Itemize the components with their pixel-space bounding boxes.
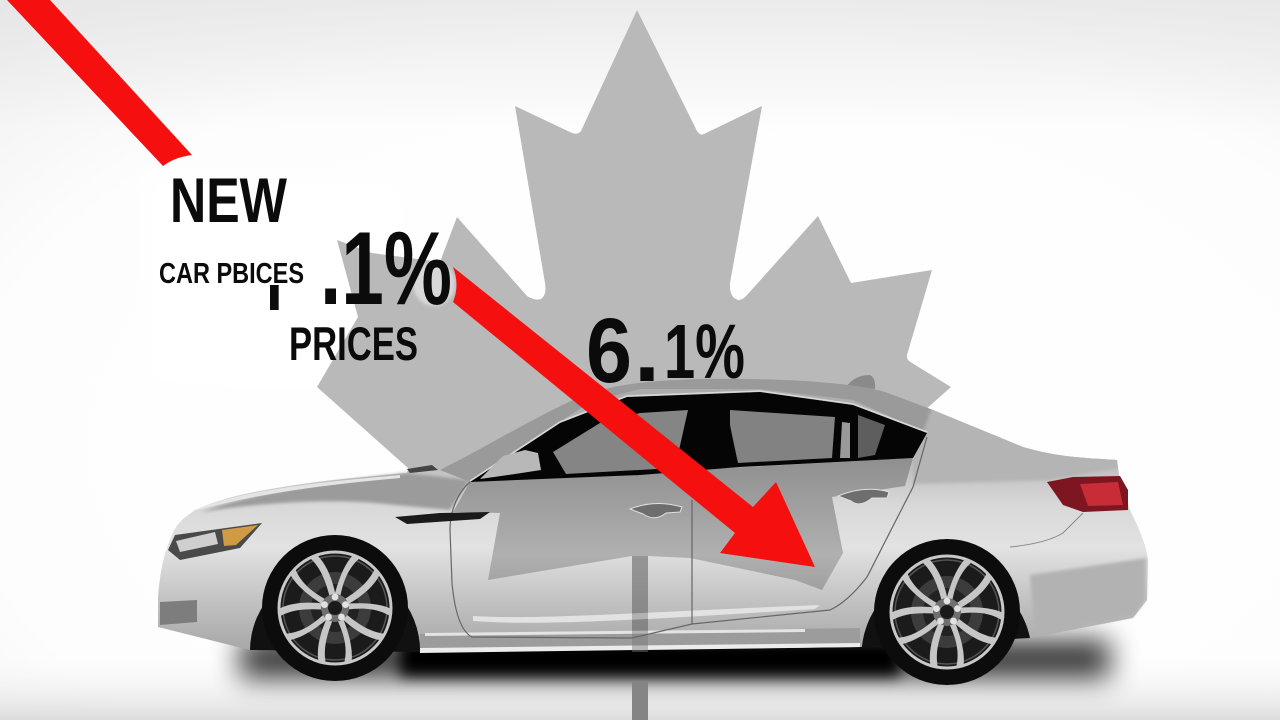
maple leaf stem [632, 682, 648, 720]
label: PRICES: PRICES [289, 317, 418, 370]
small window [840, 422, 850, 458]
chrome trim [470, 391, 927, 481]
front wheel arch [250, 566, 420, 652]
floor gradient [0, 650, 1280, 720]
door leaf shadow [453, 458, 913, 634]
headlight [168, 523, 262, 560]
statistic: .1%: .1% [320, 211, 452, 327]
stem over door [632, 556, 648, 652]
sill crease highlight [425, 629, 805, 636]
hood shading [200, 473, 470, 512]
door outlines [450, 437, 927, 638]
front window [553, 410, 688, 474]
rear bumper lower panel [1030, 558, 1146, 635]
roof band [440, 379, 933, 482]
rear quarter window [858, 415, 885, 458]
sill highlight [420, 643, 860, 653]
red arrow: lower segment [453, 267, 815, 567]
lower door highlight [473, 605, 820, 623]
clipped digit fragment: 1 [252, 232, 292, 344]
label: CAR PBICES: CAR PBICES [159, 258, 304, 290]
statistic: 6.1%: 6 [586, 300, 632, 402]
roof fin [847, 375, 875, 389]
door handle: front [630, 503, 682, 518]
halo behind percentage [413, 262, 455, 306]
car [158, 375, 1148, 685]
front wheel [262, 535, 408, 681]
heading: NEW: NEW [170, 166, 287, 236]
grille [160, 600, 197, 625]
top background shading [0, 0, 1280, 130]
statistic: 6.1%: 1% [664, 309, 745, 395]
rear bumper crease [1010, 513, 1083, 547]
middle window [730, 410, 835, 463]
wiper [407, 465, 438, 473]
lower sill band [420, 628, 860, 652]
door handle: rear [838, 489, 889, 504]
car shadow [240, 640, 1110, 678]
mirror [480, 450, 541, 479]
side vent [395, 512, 490, 524]
maple leaf [317, 10, 951, 520]
rear wheel arch [862, 570, 1030, 647]
white text panel [145, 175, 405, 390]
red arrow: upper segment [7, 0, 192, 166]
window frame [470, 392, 927, 482]
statistic: 6.1%: . [634, 299, 660, 401]
statistic: 6.1% [586, 299, 745, 402]
car body [158, 379, 1148, 652]
rear deck shading [913, 405, 1120, 484]
rear wheel [874, 539, 1020, 685]
hood highlight [190, 475, 400, 512]
taillight [1047, 476, 1128, 512]
